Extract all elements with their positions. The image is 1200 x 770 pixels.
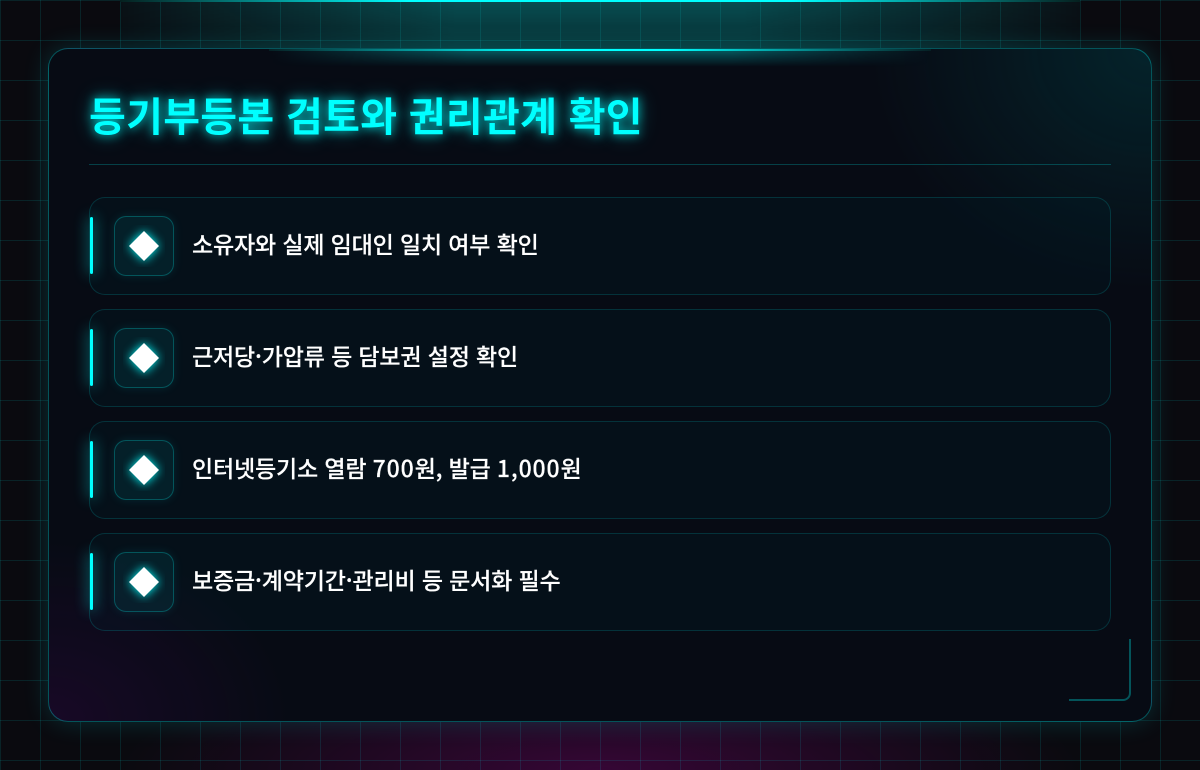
card top highlight [269,49,931,51]
top neon bar [120,0,1080,2]
corner bracket [1069,639,1131,701]
list item 2 [89,309,1111,407]
icon: diamond [114,328,174,388]
icon: diamond [114,552,174,612]
item text: 보증금·계약기간·관리비 등 문서화 필수 [192,562,560,596]
list item 1 [89,197,1111,295]
item text: 소유자와 실제 임대인 일치 여부 확인 [192,226,539,260]
accent bar [90,553,93,610]
list item 4 [89,533,1111,631]
item text: 근저당·가압류 등 담보권 설정 확인 [192,338,518,372]
title: 등기부등본 검토와 권리관계 확인 [89,85,643,143]
card top glow [294,51,906,65]
accent bar [90,441,93,498]
accent bar [90,329,93,386]
accent bar [90,217,93,274]
top glow [120,0,1080,48]
icon: diamond [114,216,174,276]
list item 3 [89,421,1111,519]
item text: 인터넷등기소 열람 700원, 발급 1,000원 [192,450,582,484]
icon: diamond [114,440,174,500]
